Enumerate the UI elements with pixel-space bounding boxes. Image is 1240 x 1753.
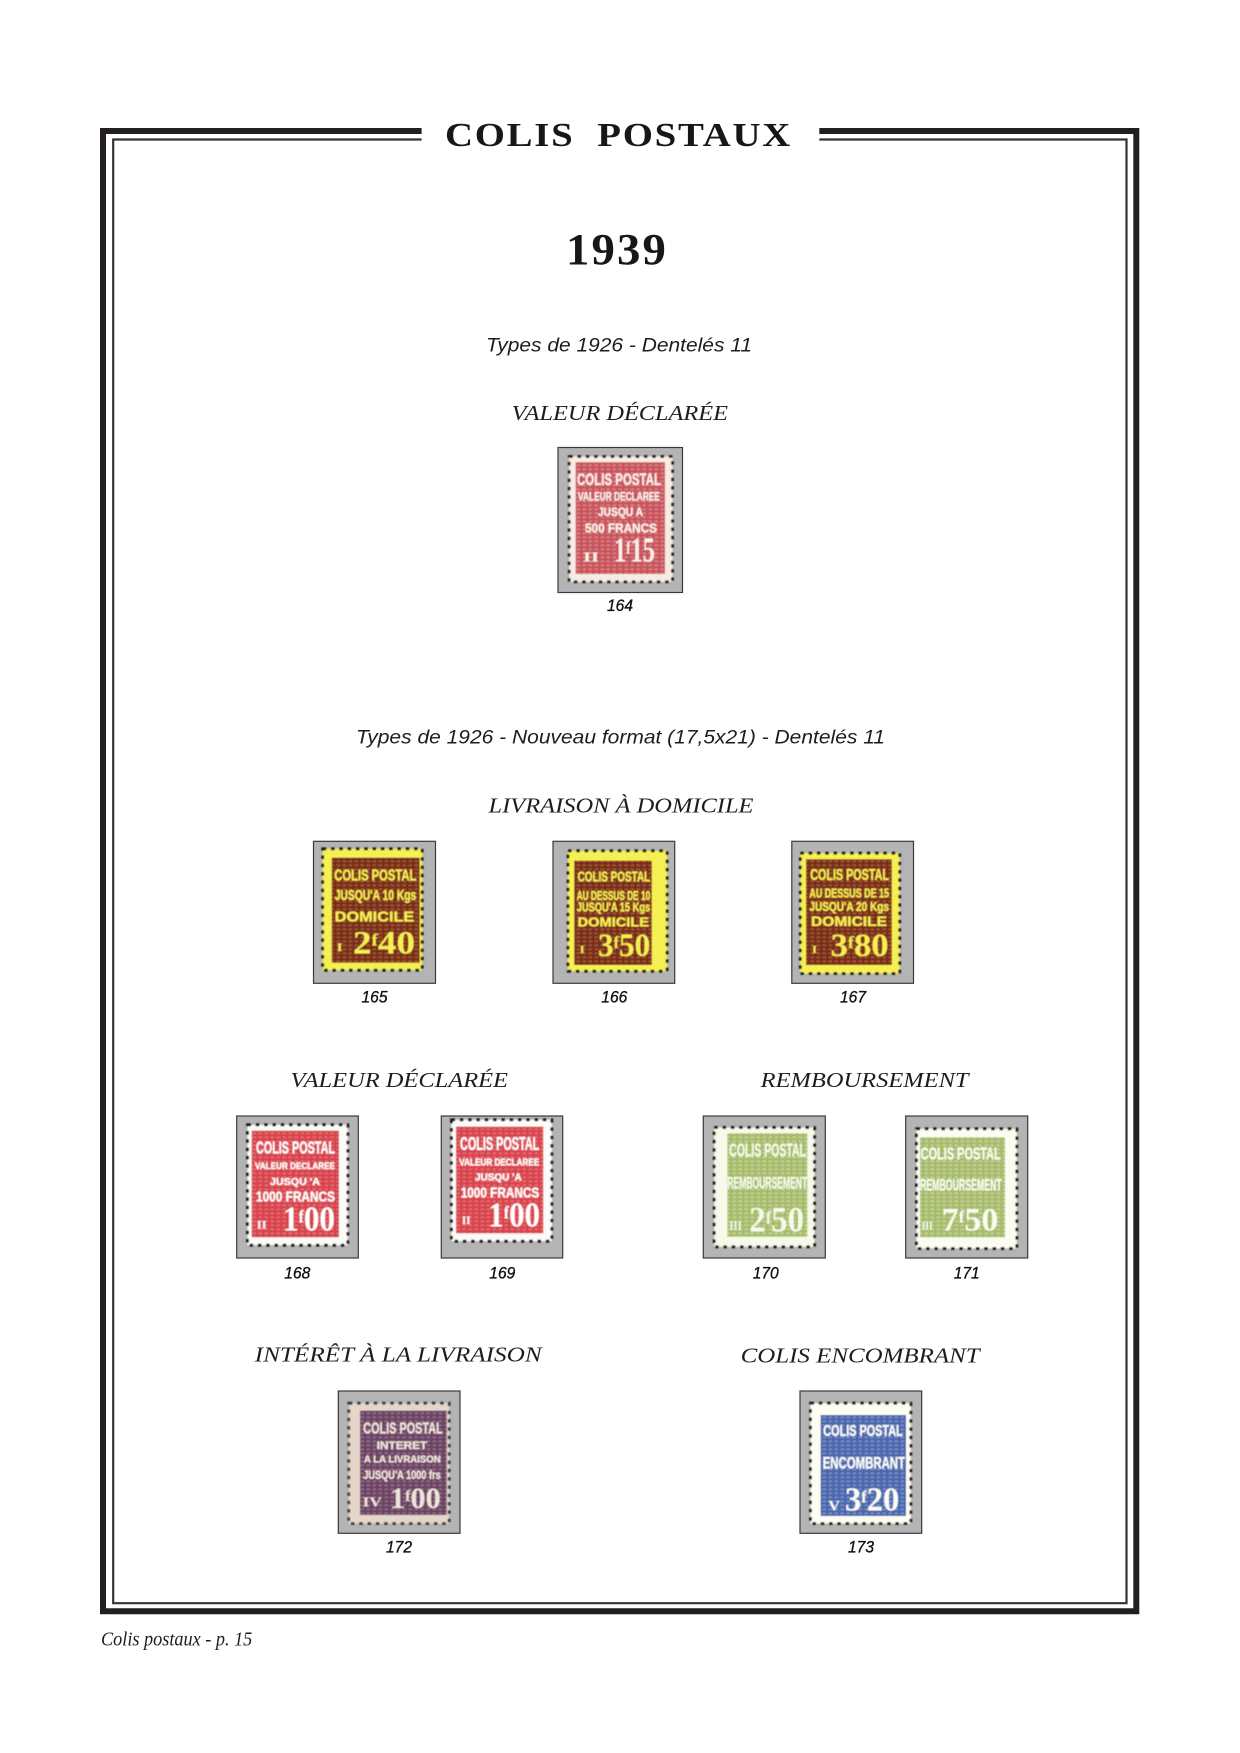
catalogue number 165: 165 xyxy=(362,988,388,1007)
stamp 167: COLIS POSTAL xyxy=(810,867,889,884)
catalogue number 168: 168 xyxy=(284,1263,311,1282)
stamp 166: AU DESSUS DE 10 xyxy=(577,889,650,903)
stamp 168: 1 xyxy=(283,1200,300,1239)
stamp 172: f xyxy=(405,1488,411,1505)
stamp 167: JUSQU'A 20 Kgs xyxy=(809,900,889,914)
stamp 173: f xyxy=(861,1488,867,1507)
stamp 170 xyxy=(703,1116,825,1258)
stamp 165 xyxy=(314,841,436,983)
catalogue number 171: 171 xyxy=(954,1263,980,1282)
title: COLIS POSTAUX xyxy=(445,117,792,154)
stamp 169: VALEUR DECLAREE xyxy=(459,1158,540,1169)
catalogue number 164: 164 xyxy=(607,596,633,615)
stamp 165: I xyxy=(337,940,343,954)
stamp 171: III xyxy=(922,1218,933,1232)
stamp 167: AU DESSUS DE 15 xyxy=(809,887,889,901)
stamp 168: f xyxy=(299,1207,305,1227)
heading: intérêt à la livraison: INTÉRÊT À LA LIVRAISON xyxy=(253,1342,543,1366)
subheading: nouveau format: Types de 1926 - Nouveau format (17,5x21) - Dentelés 11 xyxy=(356,726,885,748)
stamp 168: 1000 FRANCS xyxy=(256,1189,335,1206)
stamp 166: f xyxy=(614,933,619,952)
stamp 173: 20 xyxy=(867,1482,899,1519)
stamp 168 xyxy=(237,1116,358,1258)
heading: valeur déclarée (left): VALEUR DÉCLARÉE xyxy=(290,1068,508,1092)
stamp 173: 3 xyxy=(845,1482,862,1519)
stamp 173: V xyxy=(828,1499,840,1515)
stamp 167: 3 xyxy=(831,928,847,964)
stamp 167: DOMICILE xyxy=(811,913,887,929)
stamp 169: II xyxy=(462,1213,471,1227)
subheading: types de 1926: Types de 1926 - Dentelés 11 xyxy=(486,335,752,357)
footer page reference: Colis postaux - p. 15 xyxy=(101,1629,252,1651)
heading: remboursement: REMBOURSEMENT xyxy=(760,1068,970,1092)
stamp 165: JUSQU'A 10 Kgs xyxy=(335,888,416,904)
stamp 172: JUSQU'A 1000 frs xyxy=(363,1470,441,1482)
stamp 170: 2 xyxy=(749,1200,767,1240)
stamp 168: II xyxy=(257,1217,267,1231)
stamp 172: IV xyxy=(363,1496,382,1511)
heading: livraison à domicile: LIVRAISON À DOMICILE xyxy=(487,793,754,817)
stamp 171: 50 xyxy=(964,1203,998,1239)
stamp 166: DOMICILE xyxy=(578,915,649,930)
stamp 170: 50 xyxy=(771,1200,804,1240)
heading: valeur déclarée: VALEUR DÉCLARÉE xyxy=(512,401,728,425)
stamp 171: COLIS POSTAL xyxy=(921,1143,1001,1163)
stamp 167 xyxy=(792,841,914,983)
stamp 168: JUSQU 'A xyxy=(270,1176,320,1188)
catalogue number 170: 170 xyxy=(753,1263,779,1282)
stamp 166: COLIS POSTAL xyxy=(578,869,650,886)
stamp 172: 1 xyxy=(390,1482,405,1515)
stamp 164 xyxy=(558,448,682,592)
stamp 172: COLIS POSTAL xyxy=(363,1420,443,1437)
catalogue number 166: 166 xyxy=(601,988,628,1007)
stamp 170: REMBOURSEMENT xyxy=(727,1173,808,1192)
stamp 173: COLIS POSTAL xyxy=(823,1423,903,1440)
stamp 165: 2 xyxy=(353,925,370,961)
stamp 171: REMBOURSEMENT xyxy=(920,1176,1002,1195)
stamp 166: I xyxy=(580,944,585,956)
stamp 169: f xyxy=(504,1203,510,1223)
catalogue number 172: 172 xyxy=(386,1537,412,1556)
stamp 172: 00 xyxy=(410,1482,441,1515)
stamp 171: f xyxy=(959,1208,965,1227)
stamp 173 xyxy=(800,1391,922,1533)
stamp 169: 1 xyxy=(488,1196,506,1235)
stamp 166: 3 xyxy=(598,928,614,964)
stamp 164: f xyxy=(626,538,631,558)
stamp 168: 00 xyxy=(304,1200,335,1239)
stamp 170: COLIS POSTAL xyxy=(729,1141,806,1161)
stamp 169: COLIS POSTAL xyxy=(460,1134,539,1154)
stamp 170: f xyxy=(766,1208,772,1228)
stamp 170: III xyxy=(729,1218,742,1233)
stamp 173: ENCOMBRANT xyxy=(823,1453,905,1472)
stamp 171 xyxy=(906,1116,1028,1258)
stamp 165: DOMICILE xyxy=(335,909,414,926)
double page frame xyxy=(103,131,1136,1611)
stamp 164: 15 xyxy=(631,532,655,570)
stamp 164: VALEUR DECLAREE xyxy=(578,490,660,504)
stamp 165: 40 xyxy=(378,925,415,961)
catalogue number 167: 167 xyxy=(840,988,866,1007)
stamp 165: f xyxy=(372,930,378,949)
stamp 172: INTERET xyxy=(377,1440,428,1452)
stamp 167: I xyxy=(812,944,817,956)
stamp 169: 00 xyxy=(509,1196,540,1235)
stamp 164: COLIS POSTAL xyxy=(577,470,661,489)
catalogue number 173: 173 xyxy=(848,1537,874,1556)
stamp 166 xyxy=(553,841,675,983)
stamp 172: A LA LIVRAISON xyxy=(364,1454,441,1465)
stamp 167: f xyxy=(848,933,854,952)
stamp 166: JUSQU'A 15 Kgs xyxy=(577,901,650,915)
stamp 168: COLIS POSTAL xyxy=(256,1137,335,1157)
stamp 165: COLIS POSTAL xyxy=(334,868,416,885)
stamp 164: 1 xyxy=(614,532,631,570)
stamp 171: 7 xyxy=(942,1203,958,1239)
stamp 169: JUSQU 'A xyxy=(475,1173,522,1184)
stamp 164: JUSQU A xyxy=(598,505,643,519)
stamp 168: VALEUR DECLAREE xyxy=(255,1161,335,1172)
stamp 164: II xyxy=(583,551,599,566)
stamp 169 xyxy=(441,1116,563,1258)
stamp 169: 1000 FRANCS xyxy=(461,1185,539,1202)
stamp 167: 80 xyxy=(854,928,889,964)
heading: colis encombrant: COLIS ENCOMBRANT xyxy=(741,1344,981,1368)
catalogue number 169: 169 xyxy=(489,1263,516,1282)
year heading: 1939 xyxy=(566,225,668,274)
stamp 172 xyxy=(338,1391,460,1533)
stamp 166: 50 xyxy=(619,928,650,964)
stamp 164: 500 FRANCS xyxy=(585,521,657,536)
